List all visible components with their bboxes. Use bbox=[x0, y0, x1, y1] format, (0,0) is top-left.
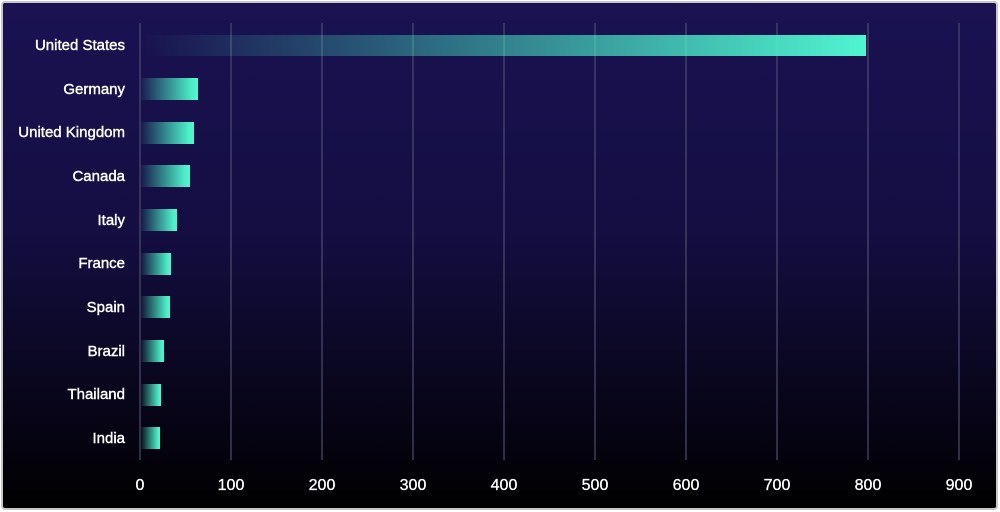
x axis labels: 600 bbox=[673, 477, 699, 494]
category labels: Spain bbox=[87, 299, 125, 316]
bar chart bbox=[141, 35, 866, 449]
x axis labels: 100 bbox=[218, 477, 244, 494]
category labels: Germany bbox=[63, 81, 125, 98]
category labels: Canada bbox=[72, 168, 126, 185]
x axis labels bbox=[136, 477, 972, 494]
x axis labels: 400 bbox=[491, 477, 517, 494]
category labels: Brazil bbox=[87, 343, 125, 360]
category labels: India bbox=[92, 430, 126, 447]
x axis labels: 700 bbox=[764, 477, 790, 494]
x axis labels: 500 bbox=[582, 477, 608, 494]
x axis labels: 300 bbox=[400, 477, 426, 494]
x axis labels: 0 bbox=[136, 477, 145, 494]
category labels: Italy bbox=[97, 212, 125, 229]
category labels: United Kingdom bbox=[18, 124, 125, 141]
x axis labels: 800 bbox=[855, 477, 881, 494]
category labels: France bbox=[78, 255, 125, 272]
category labels: United States bbox=[35, 37, 125, 54]
category labels: Thailand bbox=[67, 386, 125, 403]
x axis labels: 900 bbox=[946, 477, 972, 494]
category labels bbox=[18, 37, 126, 447]
x axis labels: 200 bbox=[309, 477, 335, 494]
